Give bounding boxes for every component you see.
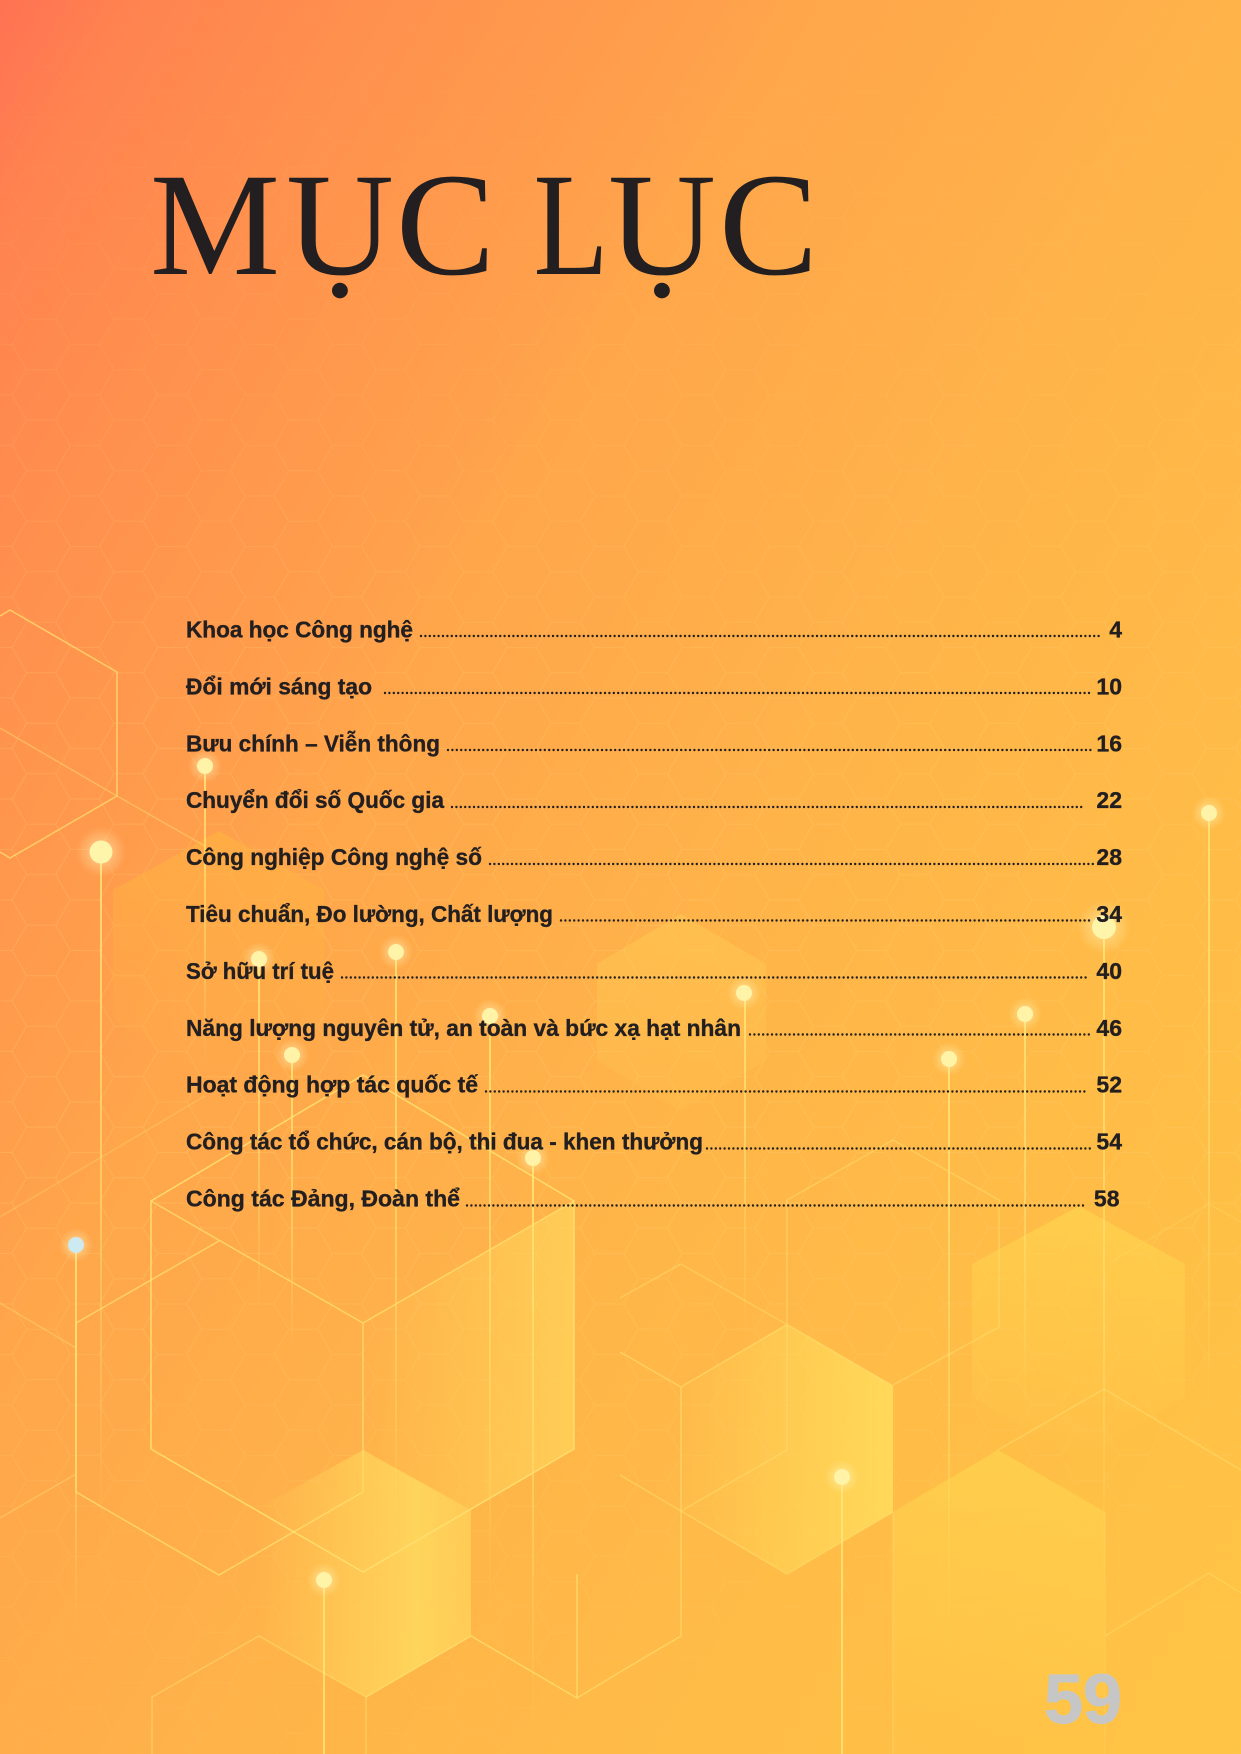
entry: Đổi mới sáng tạo — [186, 673, 1122, 699]
entry: Bưu chính – Viễn thông: 16 — [1096, 730, 1122, 756]
entry: Năng lượng nguyên tử, an toàn và bức xạ hạt nhân: Năng lượng nguyên tử, an toàn và bức xạ hạt nhân — [186, 1015, 741, 1041]
title — [150, 143, 818, 306]
table of contents — [186, 616, 1122, 1212]
entry: Sở hữu trí tuệ: Sở hữu trí tuệ — [186, 958, 334, 984]
entry: Công tác tổ chức, cán bộ, thi đua - khen thưởng: 54 — [1096, 1129, 1122, 1155]
hexagon outline network — [0, 610, 1241, 1754]
entry: Công nghiệp Công nghệ số — [186, 844, 1122, 870]
entry: Hoạt động hợp tác quốc tế — [186, 1072, 1122, 1098]
title: Ụ — [608, 143, 716, 306]
entry: Bưu chính – Viễn thông — [186, 729, 1122, 756]
entry: Tiêu chuẩn, Đo lường, Chất lượng: 34 — [1096, 901, 1122, 927]
title: C — [719, 143, 818, 306]
entry: Khoa học Công nghệ: 4 — [1109, 616, 1122, 642]
page number: 59 — [1044, 1660, 1122, 1738]
entry: Công tác tổ chức, cán bộ, thi đua - khen thưởng — [186, 1129, 1122, 1155]
entry: Sở hữu trí tuệ — [186, 958, 1122, 984]
entry: Công tác Đảng, Đoàn thể — [186, 1186, 1120, 1212]
filled translucent hexagons — [113, 831, 1185, 1754]
entry: Tiêu chuẩn, Đo lường, Chất lượng: Tiêu chuẩn, Đo lường, Chất lượng — [186, 901, 553, 927]
title: L — [534, 143, 608, 306]
entry: Chuyển đổi số Quốc gia — [186, 787, 1122, 813]
entry: Công tác Đảng, Đoàn thể: 58 — [1094, 1186, 1120, 1212]
entry: Khoa học Công nghệ — [186, 616, 1122, 642]
entry: Đổi mới sáng tạo: 10 — [1096, 673, 1122, 699]
entry: Công nghiệp Công nghệ số: 28 — [1096, 844, 1122, 870]
entry: Chuyển đổi số Quốc gia: 22 — [1096, 787, 1122, 813]
entry: Hoạt động hợp tác quốc tế: Hoạt động hợp tác quốc tế — [186, 1072, 478, 1098]
title: M — [150, 143, 280, 306]
entry: Đổi mới sáng tạo: Đổi mới sáng tạo — [186, 673, 372, 699]
entry: Năng lượng nguyên tử, an toàn và bức xạ hạt nhân — [186, 1015, 1122, 1041]
entry: Bưu chính – Viễn thông: Bưu chính – Viễn thông — [186, 729, 440, 756]
entry: Tiêu chuẩn, Đo lường, Chất lượng — [186, 901, 1122, 927]
entry: Hoạt động hợp tác quốc tế: 52 — [1096, 1072, 1122, 1098]
entry: Công tác tổ chức, cán bộ, thi đua - khen thưởng: Công tác tổ chức, cán bộ, thi đua - khen thưởng — [186, 1129, 703, 1155]
entry: Công nghiệp Công nghệ số: Công nghiệp Công nghệ số — [186, 844, 482, 870]
entry: Năng lượng nguyên tử, an toàn và bức xạ hạt nhân: 46 — [1096, 1015, 1122, 1041]
title: C — [396, 143, 495, 306]
entry: Chuyển đổi số Quốc gia: Chuyển đổi số Quốc gia — [186, 787, 444, 813]
glowing light nodes — [59, 749, 1226, 1597]
background honeycomb pattern — [0, 366, 1241, 1494]
title: Ụ — [286, 143, 394, 306]
entry: Sở hữu trí tuệ: 40 — [1096, 958, 1122, 984]
glowing light stems — [75, 766, 1210, 1754]
entry: Công tác Đảng, Đoàn thể: Công tác Đảng, Đoàn thể — [186, 1186, 460, 1212]
entry: Khoa học Công nghệ: Khoa học Công nghệ — [186, 616, 413, 642]
